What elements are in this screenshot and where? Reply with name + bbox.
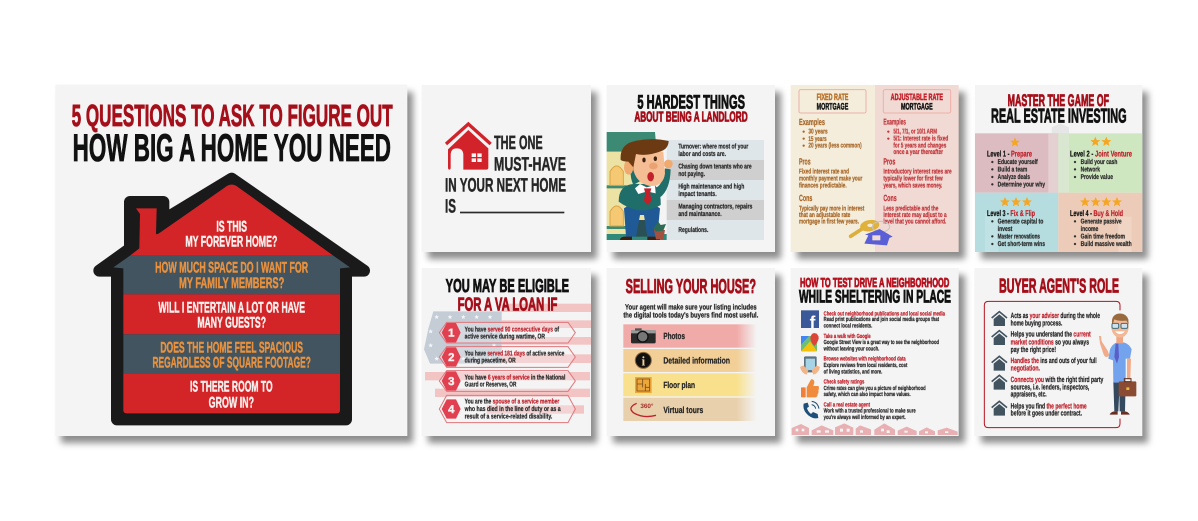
level 2: Build your cash: [1081, 158, 1117, 166]
adjustable rate heading box: ADJUSTABLE RATE: [891, 92, 943, 102]
role 5: Helps you find the perfect home: [1011, 401, 1087, 410]
role 3: negotiation.: [1011, 364, 1040, 372]
column: fixed rate: Cons: [799, 193, 812, 203]
panel: fixed vs adjustable mortgage: [791, 85, 959, 252]
row: detailed information: i: [641, 353, 645, 368]
column: adjustable rate: 5/1: Interest rate is fixed: [893, 134, 948, 142]
level 2: Level 2 - Joint Venture: [1070, 149, 1132, 158]
role 1: home buying process.: [1011, 318, 1062, 327]
title: 5 HARDEST THINGS: [637, 91, 745, 113]
fixed rate heading box: [799, 90, 866, 113]
row: virtual tours: [623, 398, 757, 421]
list bands: and maintanance.: [678, 210, 722, 218]
panel: the one must-have: [422, 85, 591, 252]
level 4: income: [1081, 225, 1098, 233]
list bands: not paying.: [678, 170, 705, 178]
column: fixed rate: [799, 90, 866, 225]
list bands: Chasing down tenants who are: [678, 162, 752, 170]
house diagram: [99, 179, 364, 419]
condition 3: You have 6 years of service in the National: [465, 373, 565, 381]
column: fixed rate: monthly payment make your: [799, 174, 862, 182]
tip: real estate agent: Work with a trusted professional to make sure: [824, 407, 916, 414]
level 2: Network: [1081, 165, 1100, 173]
list bands: labor and costs are.: [678, 150, 726, 158]
question 1: IS THIS: [216, 218, 247, 235]
condition 2: during peacetime, OR: [465, 357, 516, 364]
level 3: Level 3 - Fix & Flip: [987, 209, 1035, 218]
level 3: Generate capital to: [998, 217, 1043, 225]
level 1: Level 1 - Prepare: [987, 149, 1032, 158]
title: [446, 275, 569, 314]
role 1: Acts as your adviser during the whole: [1011, 311, 1100, 320]
intro text: Your agent will make sure your listing includes: [625, 302, 757, 311]
column: adjustable rate: Introductory interest rates are: [883, 168, 952, 175]
question 5: GROW IN?: [209, 393, 254, 411]
intro text: the digital tools today's buyers find most useful.: [623, 311, 758, 319]
column: fixed rate: finances predictable.: [799, 181, 847, 189]
list bands: High maintenance and high: [678, 183, 744, 190]
question 1: MY FOREVER HOME?: [185, 233, 277, 250]
role 5: [992, 401, 1087, 417]
fixed rate heading box: MORTGAGE: [817, 101, 848, 111]
level 2: [1058, 133, 1142, 193]
headline: [445, 132, 566, 217]
tip: walk with google: [801, 333, 939, 352]
headline: IS: [445, 195, 456, 217]
adjustable rate heading box: MORTGAGE: [901, 101, 933, 111]
illustration: agent with briefcase: [1099, 314, 1136, 415]
panel: landlord: [607, 85, 775, 252]
level 4: Build massive wealth: [1081, 240, 1132, 248]
column: adjustable rate: years, which saves money.: [883, 181, 942, 189]
tip: neighborhood data websites: [800, 355, 907, 375]
list bands: [667, 140, 764, 240]
question 3: [158, 298, 305, 331]
panel: VA loan: [422, 268, 591, 436]
icon: red house: [446, 124, 491, 170]
headline: IN YOUR NEXT HOME: [445, 174, 566, 196]
column: adjustable rate: Cons: [883, 193, 897, 203]
level 3: [975, 193, 1058, 252]
tip: neighborhood data websites: Browse websites with neighborhood data: [824, 355, 906, 362]
column: fixed rate: Pros: [799, 156, 811, 166]
list bands: impact tenants.: [678, 190, 717, 198]
condition 4: [439, 395, 575, 423]
role 2: pay the right price!: [1011, 345, 1056, 354]
role 4: sources, i.e. lenders, inspectors,: [1011, 382, 1089, 391]
panel: test drive a neighborhood: [791, 268, 959, 436]
list bands: Managing contractors, repairs: [678, 203, 752, 210]
column: adjustable rate: [883, 90, 952, 225]
level 3: Get short-term wins: [998, 240, 1045, 248]
condition 4: 4: [448, 403, 455, 416]
level 4: Level 4 - Buy & Hold: [1070, 209, 1123, 218]
row: virtual tours: 360°: [640, 403, 653, 410]
level 1: [975, 133, 1058, 193]
column: adjustable rate: once a year thereafter: [893, 148, 943, 156]
tip: local social media: Check out neighborhood publications and local social media: [824, 310, 945, 317]
column: adjustable rate: typically lower for first few: [883, 174, 943, 182]
rounded list frame: [984, 301, 1120, 428]
condition 1: [439, 322, 575, 343]
condition 3: 3: [448, 375, 454, 388]
role 3: [992, 356, 1097, 372]
row: detailed information: Detailed information: [663, 355, 730, 365]
level 4: Generate passive: [1081, 217, 1122, 225]
houses skyline strip: [792, 423, 958, 435]
level 2: Provide value: [1081, 173, 1113, 181]
condition 4: result of a service-related disability.: [465, 413, 552, 420]
column: fixed rate: 30 years: [808, 128, 828, 135]
question 2: MY FAMILY MEMBERS?: [179, 274, 284, 291]
title: [634, 91, 748, 125]
column: fixed rate: Examples: [799, 117, 825, 127]
question 4: [152, 338, 311, 371]
column: adjustable rate: 5/1, 7/1, or 10/1 ARM: [893, 128, 937, 135]
row: floor plan: Floor plan: [663, 380, 695, 390]
row: photos: Photos: [663, 331, 685, 341]
title: FOR A VA LOAN IF: [458, 293, 557, 314]
column: fixed rate: 15 years: [808, 135, 827, 143]
title: SELLING YOUR HOUSE?: [626, 275, 756, 297]
level 1: Analyze deals: [998, 173, 1030, 181]
question 5: [190, 378, 273, 411]
condition 4: who has died in the line of duty or as a: [464, 405, 561, 413]
column: adjustable rate: level that you cannot afford.: [883, 218, 946, 225]
tip: local social media: Read print publications and join social media groups that: [824, 316, 939, 322]
tip: walk with google: Google Street View is a great way to see the neighborhood: [824, 339, 939, 345]
row: detailed information: [623, 349, 757, 372]
fixed rate heading box: FIXED RATE: [817, 92, 848, 102]
question 1: [185, 218, 277, 250]
column: adjustable rate: interest rate may adjust to a: [883, 211, 947, 219]
headline: MUST-HAVE: [494, 153, 566, 175]
question 3: WILL I ENTERTAIN A LOT OR HAVE: [158, 298, 305, 316]
role 4: [992, 375, 1103, 398]
role 4: Connects you with the right third party: [1011, 375, 1103, 384]
tip: local social media: [801, 310, 945, 332]
level 1: Build a team: [998, 165, 1027, 173]
column: fixed rate: mortgage in first few years.: [799, 218, 859, 225]
title: [799, 276, 951, 307]
list bands: Regulations.: [678, 226, 708, 234]
tip: local social media: connect local residents.: [824, 322, 872, 329]
role 2: Helps you understand the current: [1011, 330, 1091, 338]
panel: master the game of real estate investing: [975, 85, 1142, 252]
level 1: Determine your why: [998, 180, 1045, 188]
level 3: Master renovations: [998, 232, 1040, 240]
role 4: appraisers, etc.: [1011, 390, 1047, 398]
column: fixed rate: 20 years (less common): [808, 142, 862, 149]
title: [991, 91, 1127, 127]
list bands: Turnover: where most of your: [678, 142, 748, 150]
level 3: invest: [998, 225, 1012, 233]
tip: real estate agent: you're always well informed by an expert.: [824, 414, 906, 420]
panel: selling your house: [607, 268, 775, 436]
column: fixed rate: Typically pay more in interest: [799, 204, 864, 212]
role 3: Handles the ins and outs of your full: [1011, 356, 1097, 365]
role 5: before it goes under contract.: [1011, 409, 1082, 417]
tip: walk with google: without leaving your couch.: [823, 345, 879, 352]
row: photos: [623, 324, 757, 348]
level 4: [1058, 193, 1142, 252]
question 2: [155, 259, 308, 291]
tip: neighborhood data websites: of living statistics, and more.: [824, 368, 882, 375]
tip: safety ratings: [801, 378, 926, 397]
column: adjustable rate: Less predictable and the: [883, 204, 938, 212]
tip: local social media: f: [810, 313, 816, 332]
column: adjustable rate: for 5 years and changes: [893, 141, 946, 149]
tip: real estate agent: [803, 401, 916, 420]
title: MASTER THE GAME OF: [1008, 91, 1109, 110]
condition 1: You have served 90 consecutive days of: [465, 325, 559, 333]
condition 4: You are the spouse of a service member: [465, 398, 559, 405]
column: fixed rate: that an adjustable rate: [799, 211, 850, 219]
headline: THE ONE: [494, 132, 543, 153]
faint tower behind title: [1052, 123, 1069, 133]
tip: real estate agent: Call a real estate agent: [824, 401, 870, 408]
panel: how big a home you need: [55, 85, 407, 436]
tip: safety ratings: safety, which can also impact home values.: [824, 391, 911, 397]
question 4: REGARDLESS OF SQUARE FOOTAGE?: [152, 354, 311, 371]
question 2: HOW MUCH SPACE DO I WANT FOR: [155, 259, 308, 276]
tip: safety ratings: Check safety ratings: [824, 378, 864, 385]
title: YOU MAY BE ELIGIBLE: [446, 275, 569, 296]
condition 2: 2: [448, 351, 454, 364]
condition 3: [439, 371, 575, 391]
title: HOW BIG A HOME YOU NEED: [73, 126, 391, 169]
tip: walk with google: Take a walk with Google: [824, 333, 871, 339]
level 1: Educate yourself: [998, 158, 1038, 166]
question 3: MANY GUESTS?: [197, 314, 266, 331]
role 2: [992, 330, 1091, 354]
title: WHILE SHELTERING IN PLACE: [799, 287, 951, 307]
condition 3: Guard or Reserves, OR: [465, 381, 516, 388]
column: fixed rate: Fixed interest rate and: [799, 168, 849, 175]
adjustable rate heading box: [883, 90, 951, 113]
panel: buyer agent's role: [974, 268, 1142, 436]
tip: neighborhood data websites: Explore reviews from local residents, cost: [824, 362, 907, 368]
question 4: DOES THE HOME FEEL SPACIOUS: [160, 338, 303, 356]
column: adjustable rate: Pros: [883, 156, 895, 166]
condition 1: 1: [448, 327, 454, 339]
role 2: market conditions so you always: [1011, 337, 1089, 346]
flag background: [424, 304, 591, 414]
column: adjustable rate: Examples: [883, 117, 906, 126]
intro text: [623, 302, 758, 319]
role 1: [992, 311, 1100, 327]
card drop shadows: [61, 92, 1148, 443]
condition 2: You have served 181 days of active service: [465, 349, 564, 357]
icon: house key: [851, 218, 893, 245]
condition 2: [439, 347, 575, 367]
title: 5 QUESTIONS TO ASK TO FIGURE OUT: [72, 99, 393, 133]
level 4: Gain time freedom: [1081, 232, 1125, 240]
question 5: IS THERE ROOM TO: [190, 378, 273, 395]
row: floor plan: [623, 373, 757, 396]
condition 1: active service during wartime, OR: [465, 333, 545, 340]
title: HOW TO TEST DRIVE A NEIGHBORHOOD: [800, 276, 949, 290]
title: [72, 99, 393, 169]
illustration: stressed landlord: [607, 132, 673, 240]
tip: safety ratings: Crime rates can give you a picture of neighborhood: [824, 385, 926, 391]
row: virtual tours: Virtual tours: [663, 405, 703, 415]
title: ABOUT BEING A LANDLORD: [634, 109, 748, 125]
